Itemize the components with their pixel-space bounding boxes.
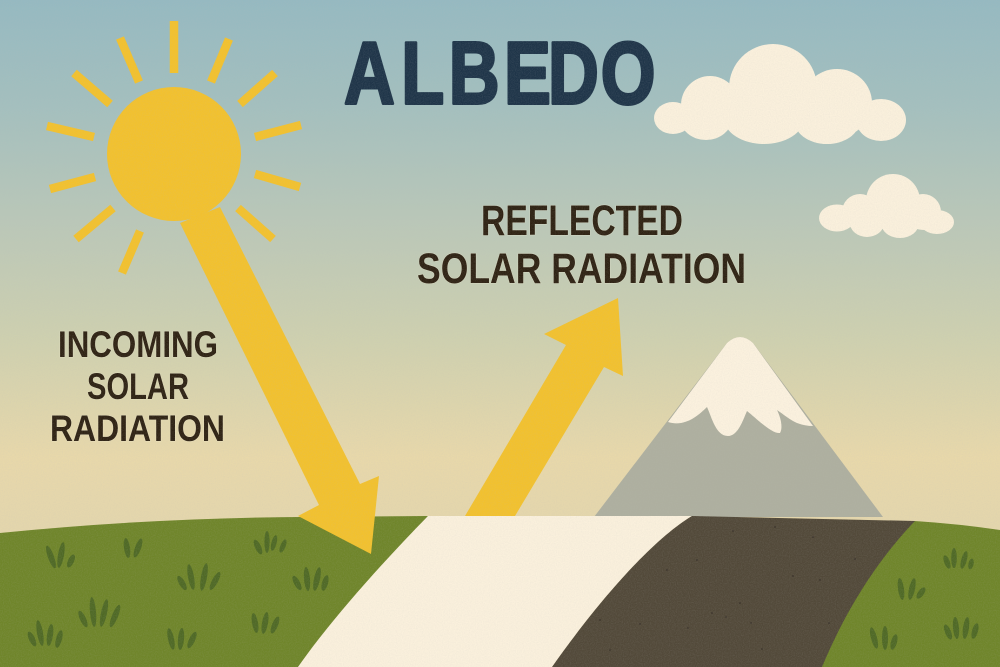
ground: left grass — [0, 516, 428, 667]
grass tufts — [26, 531, 980, 651]
icon: sun with rays — [47, 21, 301, 273]
title: ALBEDO — [344, 24, 656, 122]
label: incoming solar radiation: INCOMING — [58, 323, 218, 365]
mountain — [594, 337, 883, 517]
label: incoming solar radiation — [50, 323, 225, 449]
surface: dark asphalt strip — [552, 516, 915, 667]
label: incoming solar radiation: SOLAR — [87, 365, 189, 407]
ground: right grass — [815, 521, 1000, 667]
label: incoming solar radiation: RADIATION — [50, 407, 225, 449]
snow cap — [668, 337, 813, 436]
surface: white snow strip — [298, 516, 692, 667]
label: reflected solar radiation: REFLECTED — [481, 197, 683, 245]
arrow: reflected solar radiation — [465, 298, 623, 516]
cloud: large — [654, 44, 906, 144]
label: reflected solar radiation: SOLAR RADIATION — [417, 245, 746, 293]
label: reflected solar radiation — [417, 197, 746, 293]
arrow: incoming solar radiation — [180, 207, 379, 554]
cloud: small — [819, 174, 954, 238]
